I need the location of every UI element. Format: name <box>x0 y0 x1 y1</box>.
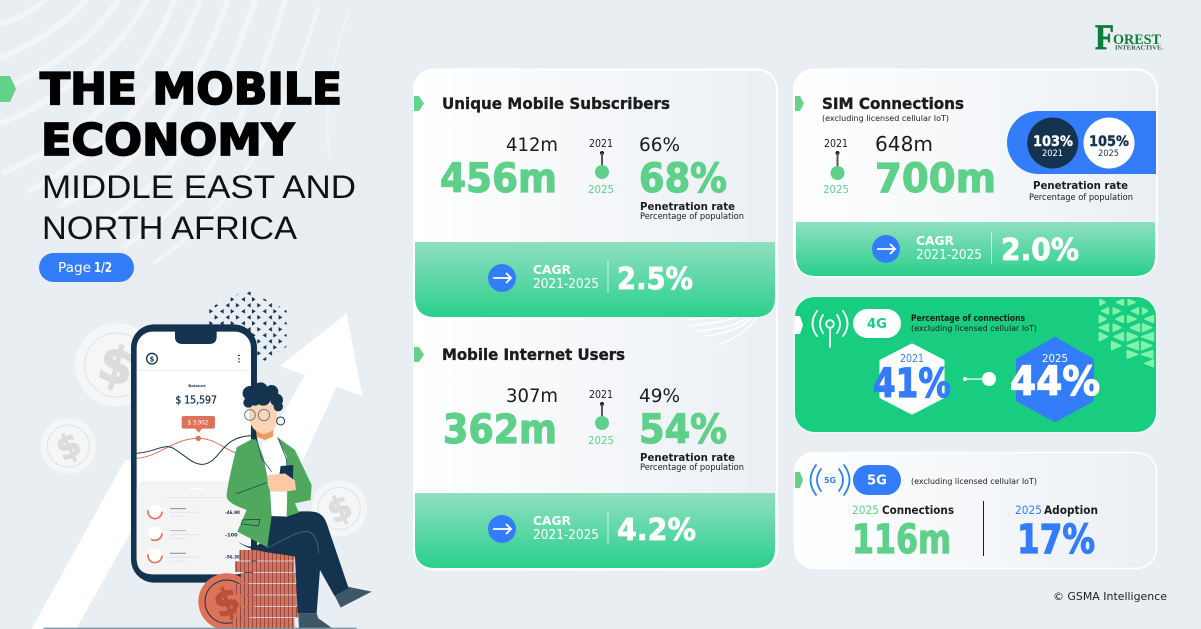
CAGR bar: subscribers: 2021-2025 <box>533 277 599 292</box>
connections stat: 2025 <box>852 503 879 517</box>
phone: -56.30 <box>225 555 241 561</box>
penetration pill: 105% <box>1089 134 1129 150</box>
page pill: Page <box>58 261 91 276</box>
logo: Forest Interactive: OREST <box>1113 32 1161 48</box>
CAGR bar: subscribers: 2.5% <box>617 262 693 297</box>
section: mobile internet users: 362m <box>443 407 557 453</box>
phone in hand and hands <box>277 465 293 490</box>
adoption stat <box>1015 503 1098 563</box>
coin right <box>311 480 367 536</box>
logo: Forest Interactive: F <box>1095 17 1114 57</box>
shirt <box>262 442 288 517</box>
panel: SIM connections: SIM Connections <box>822 94 964 113</box>
adoption stat: 2025 <box>1015 503 1042 517</box>
jacket <box>227 437 272 547</box>
coin small left <box>40 418 96 474</box>
phone <box>131 324 257 583</box>
panel: 4G: Percentage of connections <box>911 314 1025 324</box>
CAGR bar: SIM <box>796 222 1155 276</box>
coin right: $ <box>321 486 358 531</box>
orange coin: $ <box>208 578 246 627</box>
section: mobile internet users: 2021 <box>589 389 613 401</box>
CAGR bar: internet users: 4.2% <box>617 513 696 548</box>
panel: SIM connections: Penetration rate <box>1033 179 1128 192</box>
2025 hexagon: 44% <box>1010 359 1100 405</box>
icon: 5G signal <box>810 465 850 495</box>
section: unique mobile subscribers: 68% <box>639 156 727 202</box>
panel: 4G <box>794 296 1156 432</box>
section: mobile internet users: 49% <box>639 385 680 407</box>
page pill <box>39 253 134 282</box>
panel: SIM connections: Percentage of population <box>1029 193 1133 203</box>
page pill: 1/2 <box>94 261 112 276</box>
title block: NORTH AFRICA <box>42 210 298 246</box>
2025 hexagon <box>1010 339 1100 420</box>
4G pill: 4G <box>867 317 887 332</box>
panel: SIM connections: 648m <box>875 132 933 156</box>
section: mobile internet users: Penetration rate <box>640 451 735 464</box>
CAGR bar: SIM: 2.0% <box>1001 233 1079 268</box>
penetration pill <box>1007 111 1156 174</box>
connections stat: Connections <box>882 503 954 517</box>
orange coin <box>198 573 255 629</box>
panel: 5G <box>794 452 1156 568</box>
triangle dot pattern <box>209 292 287 361</box>
CAGR bar: SIM: 2021-2025 <box>916 248 982 263</box>
section: mobile internet users: 307m <box>506 385 558 407</box>
adoption stat: 17% <box>1017 517 1095 563</box>
logo: Forest Interactive <box>1095 17 1164 57</box>
phone: -100 <box>225 532 238 538</box>
CAGR bar: subscribers <box>415 242 775 317</box>
logo: Forest Interactive: INTERACTIVE. <box>1115 46 1164 52</box>
connector <box>963 372 996 386</box>
section: unique mobile subscribers: 2021 <box>589 138 613 150</box>
title block: ECONOMY <box>41 115 295 166</box>
illustration: woman with phone and coins <box>32 290 372 629</box>
phone: $ 3,902 <box>188 420 208 427</box>
penetration pill: 103% <box>1033 134 1073 150</box>
title block <box>0 64 356 246</box>
section: mobile internet users: Percentage of population <box>640 463 744 473</box>
shoes <box>298 613 333 629</box>
coin large <box>75 323 158 407</box>
panel: 5G: (excluding licensed cellular IoT) <box>911 477 1037 486</box>
woman <box>227 382 372 629</box>
coin stack <box>233 550 298 629</box>
section: unique mobile subscribers: Percentage of population <box>640 212 744 222</box>
icon: 5G signal: 5G <box>824 476 836 485</box>
panel: SIM connections: (excluding licensed cellular IoT) <box>822 114 949 123</box>
section: unique mobile subscribers: 412m <box>506 134 558 156</box>
icon: 4G antenna <box>812 311 848 347</box>
connections stat: 116m <box>852 517 951 563</box>
section: unique mobile subscribers: 2025 <box>588 184 614 196</box>
source credit: © GSMA Intelligence <box>1053 590 1167 603</box>
phone: $ <box>150 355 155 363</box>
background swirl <box>0 0 350 262</box>
phone: Balance <box>188 384 206 388</box>
title block: THE MOBILE <box>40 64 342 115</box>
section: unique mobile subscribers <box>414 94 744 222</box>
section: unique mobile subscribers: 66% <box>639 134 680 156</box>
2021 hexagon: 41% <box>873 361 951 407</box>
section: unique mobile subscribers: 456m <box>440 156 557 202</box>
panel: left card <box>414 70 777 570</box>
penetration pill: 2021 <box>1042 149 1063 159</box>
section: mobile internet users <box>414 345 744 473</box>
section: unique mobile subscribers: Unique Mobile Subscribers <box>442 94 670 113</box>
adoption stat: Adoption <box>1044 503 1098 517</box>
panel: SIM connections: 2025 <box>823 184 849 196</box>
5G pill <box>853 465 901 495</box>
ground line <box>43 628 357 629</box>
coin small left: $ <box>50 424 87 469</box>
triangle pattern <box>1099 300 1153 367</box>
coin large: $ <box>92 333 141 398</box>
decorative swirl under first bar <box>685 317 757 345</box>
panel: SIM connections <box>794 70 1157 276</box>
5G pill: 5G <box>867 474 887 488</box>
4G pill <box>853 309 901 338</box>
CAGR bar: subscribers: CAGR <box>533 262 571 277</box>
neck <box>256 425 273 440</box>
CAGR bar: internet users: 2021-2025 <box>533 528 599 543</box>
panel: 4G: (excluding licensed cellular IoT) <box>911 324 1037 333</box>
face <box>249 403 277 434</box>
section: mobile internet users: 54% <box>639 407 727 453</box>
2021 hexagon: 2021 <box>900 352 924 365</box>
section: unique mobile subscribers: Penetration rate <box>640 200 735 213</box>
CAGR bar: internet users: CAGR <box>533 513 571 528</box>
section: mobile internet users: Mobile Internet Users <box>442 345 625 364</box>
2021 hexagon <box>873 345 951 413</box>
connections stat <box>852 503 954 563</box>
phone: -46.90 <box>225 510 241 516</box>
hair <box>243 382 283 440</box>
panel: SIM connections: 2021 <box>824 138 848 150</box>
CAGR bar: SIM: CAGR <box>916 233 954 248</box>
phone: $ 15,597 <box>175 393 217 406</box>
CAGR bar: internet users <box>415 493 775 568</box>
growth arrow <box>32 313 362 629</box>
section: mobile internet users: 2025 <box>588 435 614 447</box>
trousers <box>238 511 349 613</box>
title block: MIDDLE EAST AND <box>42 169 356 205</box>
panel: SIM connections: 700m <box>875 156 996 202</box>
2025 hexagon: 2025 <box>1042 352 1068 365</box>
penetration pill: 2025 <box>1098 149 1119 159</box>
